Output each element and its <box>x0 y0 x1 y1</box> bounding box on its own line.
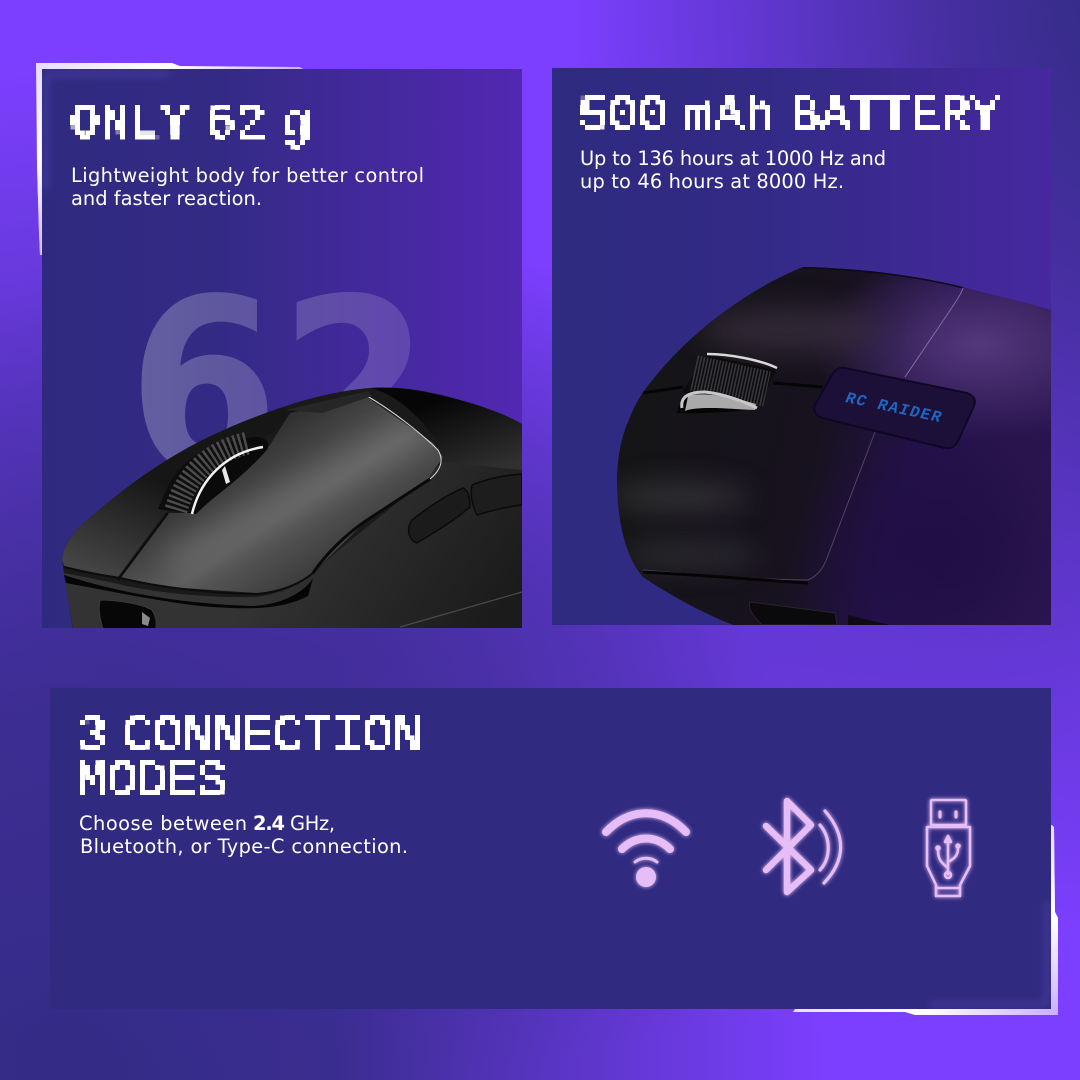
description: battery life: Up to 136 hours at 1000 Hz and <box>580 147 886 170</box>
description: connection: GHz, <box>290 812 335 835</box>
oled badge: RC RAIDER <box>844 389 943 427</box>
description: connection: Choose between <box>79 812 247 835</box>
description: connection: Bluetooth, or Type-C connection. <box>80 835 408 858</box>
scroll wheel <box>160 440 263 514</box>
heading: 3 connection modes: 3 CONNECTION <box>77 709 423 766</box>
icon: wifi <box>606 813 686 887</box>
heading: 500 mAh battery: 500 mAh BATTERY <box>578 89 1000 146</box>
wheel slot <box>158 437 268 514</box>
oled badge <box>814 368 975 448</box>
description: battery life: up to 46 hours at 8000 Hz. <box>580 170 844 193</box>
ghost number 62: 62 <box>128 247 430 527</box>
main button <box>120 397 443 593</box>
mouse photo: front view <box>62 388 522 640</box>
side buttons <box>409 474 522 543</box>
description: lightweight: Lightweight body for better control <box>71 164 424 187</box>
heading: 3 connection modes: MODES <box>77 754 227 811</box>
panel: battery <box>552 68 1060 630</box>
icon: bluetooth <box>766 801 841 892</box>
scroll wheel <box>677 354 777 413</box>
description: lightweight: and faster reaction. <box>71 187 262 210</box>
heading: only 62 g: ONLY 62 g <box>70 96 312 153</box>
panel: connection modes <box>50 688 1051 1009</box>
mouse photo: oled view <box>617 267 1051 625</box>
panel: only 62 g <box>42 69 522 640</box>
icon: usb <box>927 800 970 896</box>
description: connection: 2.4 <box>253 812 285 835</box>
frame corner: top left <box>36 63 303 255</box>
side buttons <box>750 602 837 625</box>
usb port <box>100 600 156 628</box>
frame corner: bottom right <box>793 825 1058 1015</box>
